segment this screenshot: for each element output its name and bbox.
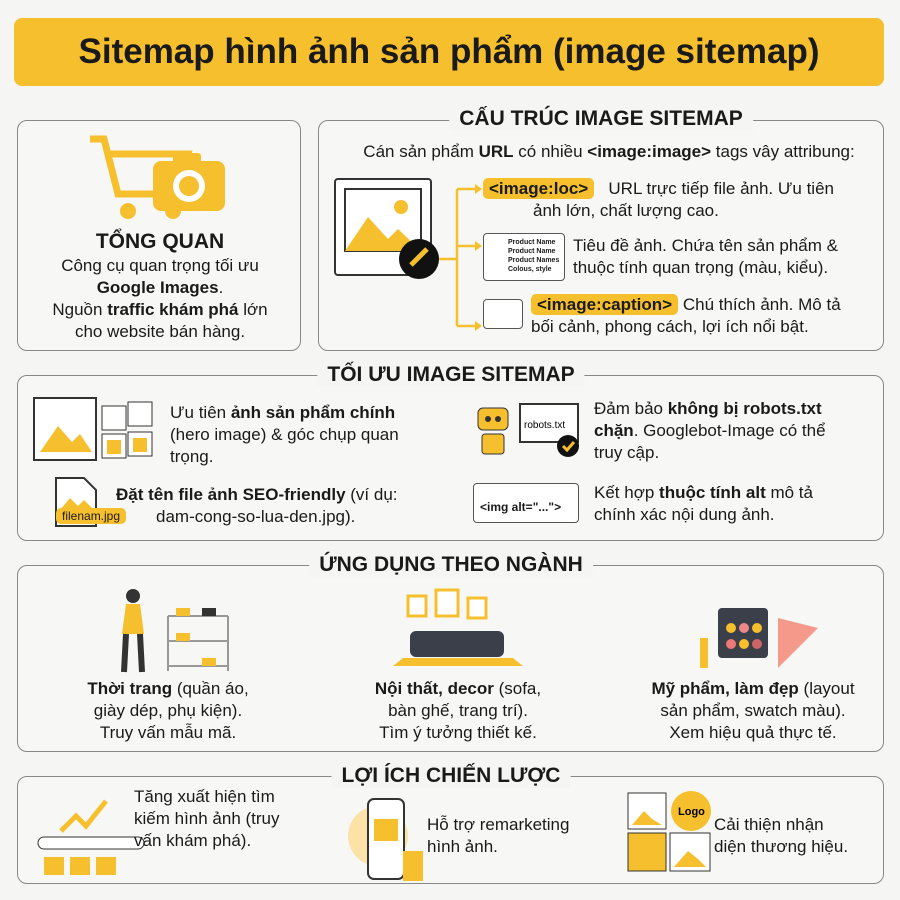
panel: structure <box>318 120 884 351</box>
icon: fashion <box>121 589 229 672</box>
item: image loc: ảnh lớn, chất lượng cao. <box>533 201 719 220</box>
text: overview: Google Images. <box>97 278 223 297</box>
icon: cosmetics <box>700 608 818 668</box>
panel: structure: bối cảnh, phong cách, lợi ích nổi bật. <box>531 317 809 336</box>
text: robots: Đảm bảo không bị robots.txt <box>594 399 822 418</box>
text: alt <box>594 483 813 524</box>
panel: industries <box>17 565 884 752</box>
icon: brand: Logo <box>678 806 705 818</box>
item: title: Colous, style <box>508 266 552 273</box>
text: visibility: Tăng xuất hiện tìm <box>134 787 275 806</box>
text: furniture: Tìm ý tưởng thiết kế. <box>379 723 537 742</box>
text: brand: Cải thiện nhận <box>714 815 824 834</box>
icon: cart camera <box>90 136 225 219</box>
text: furniture <box>375 679 541 742</box>
text: brand <box>714 815 848 856</box>
panel: structure: <image:caption> Chú thích ảnh. Mô tả <box>537 295 841 314</box>
item: title <box>483 233 565 281</box>
text: cosmetics <box>651 679 855 742</box>
text: fashion: Truy vấn mẫu mã. <box>100 723 236 742</box>
panel: structure: thuộc tính quan trọng (màu, kiểu). <box>573 258 828 277</box>
icon: search growth <box>38 800 144 875</box>
text: intro: Cán sản phẩm URL có nhiều <image:image> tags vây attribung: <box>363 142 855 161</box>
text: remarketing: hình ảnh. <box>427 837 498 856</box>
text: fashion: giày dép, phụ kiện). <box>94 701 242 720</box>
text: filename: Đặt tên file ảnh SEO-friendly (ví dụ: <box>116 485 398 504</box>
item: title: Product Name <box>508 239 555 246</box>
title <box>14 18 884 86</box>
item: title: Product Name <box>508 248 555 255</box>
heading: benefits: LỢI ÍCH CHIẾN LƯỢC <box>342 764 560 787</box>
text: hero: trọng. <box>170 447 213 466</box>
panel: benefits <box>17 776 884 884</box>
text: cosmetics: Mỹ phẩm, làm đẹp (layout <box>651 679 855 698</box>
text: cosmetics: Xem hiệu quả thực tế. <box>669 723 837 742</box>
title: Sitemap hình ảnh sản phẩm (image sitemap) <box>78 32 819 71</box>
text: fashion <box>87 679 249 742</box>
arrows: connectors <box>439 184 482 331</box>
text: brand: diện thương hiệu. <box>714 837 848 856</box>
text: furniture: bàn ghế, trang trí). <box>388 701 528 720</box>
icon: file <box>55 477 97 527</box>
icon: robot: robots.txt <box>524 420 565 431</box>
heading: structure: CẤU TRÚC IMAGE SITEMAP <box>459 107 743 130</box>
icon: robot <box>478 403 579 457</box>
icon: alt tag: <img alt="..."> <box>480 500 561 514</box>
heading: industries: ỨNG DỤNG THEO NGÀNH <box>319 553 583 576</box>
text: alt: Kết hợp thuộc tính alt mô tả <box>594 483 813 502</box>
text: overview: Nguồn traffic khám phá lớn <box>52 300 268 319</box>
text: overview: cho website bán hàng. <box>75 322 245 341</box>
item: image loc <box>483 178 834 220</box>
text: robots: chặn. Googlebot-Image có thể <box>594 421 826 440</box>
icon: brand <box>628 791 711 872</box>
text: visibility: vấn khám phá). <box>134 831 251 850</box>
panel: optimize <box>17 375 884 541</box>
icon: furniture <box>393 588 523 666</box>
panel: overview <box>17 120 301 351</box>
panel: optimize: filenam.jpg <box>62 509 120 523</box>
text: hero: Ưu tiên ảnh sản phẩm chính <box>170 403 395 422</box>
item: caption <box>483 299 523 329</box>
text: robots: truy cập. <box>594 443 659 462</box>
text: visibility: kiếm hình ảnh (truy <box>134 809 280 828</box>
text: fashion: Thời trang (quần áo, <box>87 679 249 698</box>
text: furniture: Nội thất, decor (sofa, <box>375 679 541 698</box>
text: remarketing <box>427 815 569 856</box>
icon: image with link <box>334 178 439 279</box>
text: overview: TỔNG QUAN <box>96 230 224 253</box>
text: overview <box>52 228 268 341</box>
text: hero <box>170 403 399 466</box>
text: robots <box>594 399 826 462</box>
text: hero: (hero image) & góc chụp quan <box>170 425 399 444</box>
text: cosmetics: sản phẩm, swatch màu). <box>660 701 846 720</box>
text: visibility <box>134 787 280 850</box>
text: remarketing: Hỗ trợ remarketing <box>427 815 569 834</box>
text: filename: dam-cong-so-lua-den.jpg). <box>156 507 355 526</box>
heading: optimize: TỐI ƯU IMAGE SITEMAP <box>327 363 575 386</box>
text: filename <box>116 485 398 526</box>
text: overview: Công cụ quan trọng tối ưu <box>61 256 259 275</box>
item: title: Product Names <box>508 257 559 264</box>
text: alt: chính xác nội dung ảnh. <box>594 505 775 524</box>
icon: phone <box>348 798 423 881</box>
item: image loc: <image:loc> URL trực tiếp file ảnh. Ưu tiên <box>489 179 834 198</box>
icon: alt tag <box>473 483 579 523</box>
icon: images <box>33 397 152 461</box>
panel: structure: Tiêu đề ảnh. Chứa tên sản phẩm & <box>573 236 838 255</box>
